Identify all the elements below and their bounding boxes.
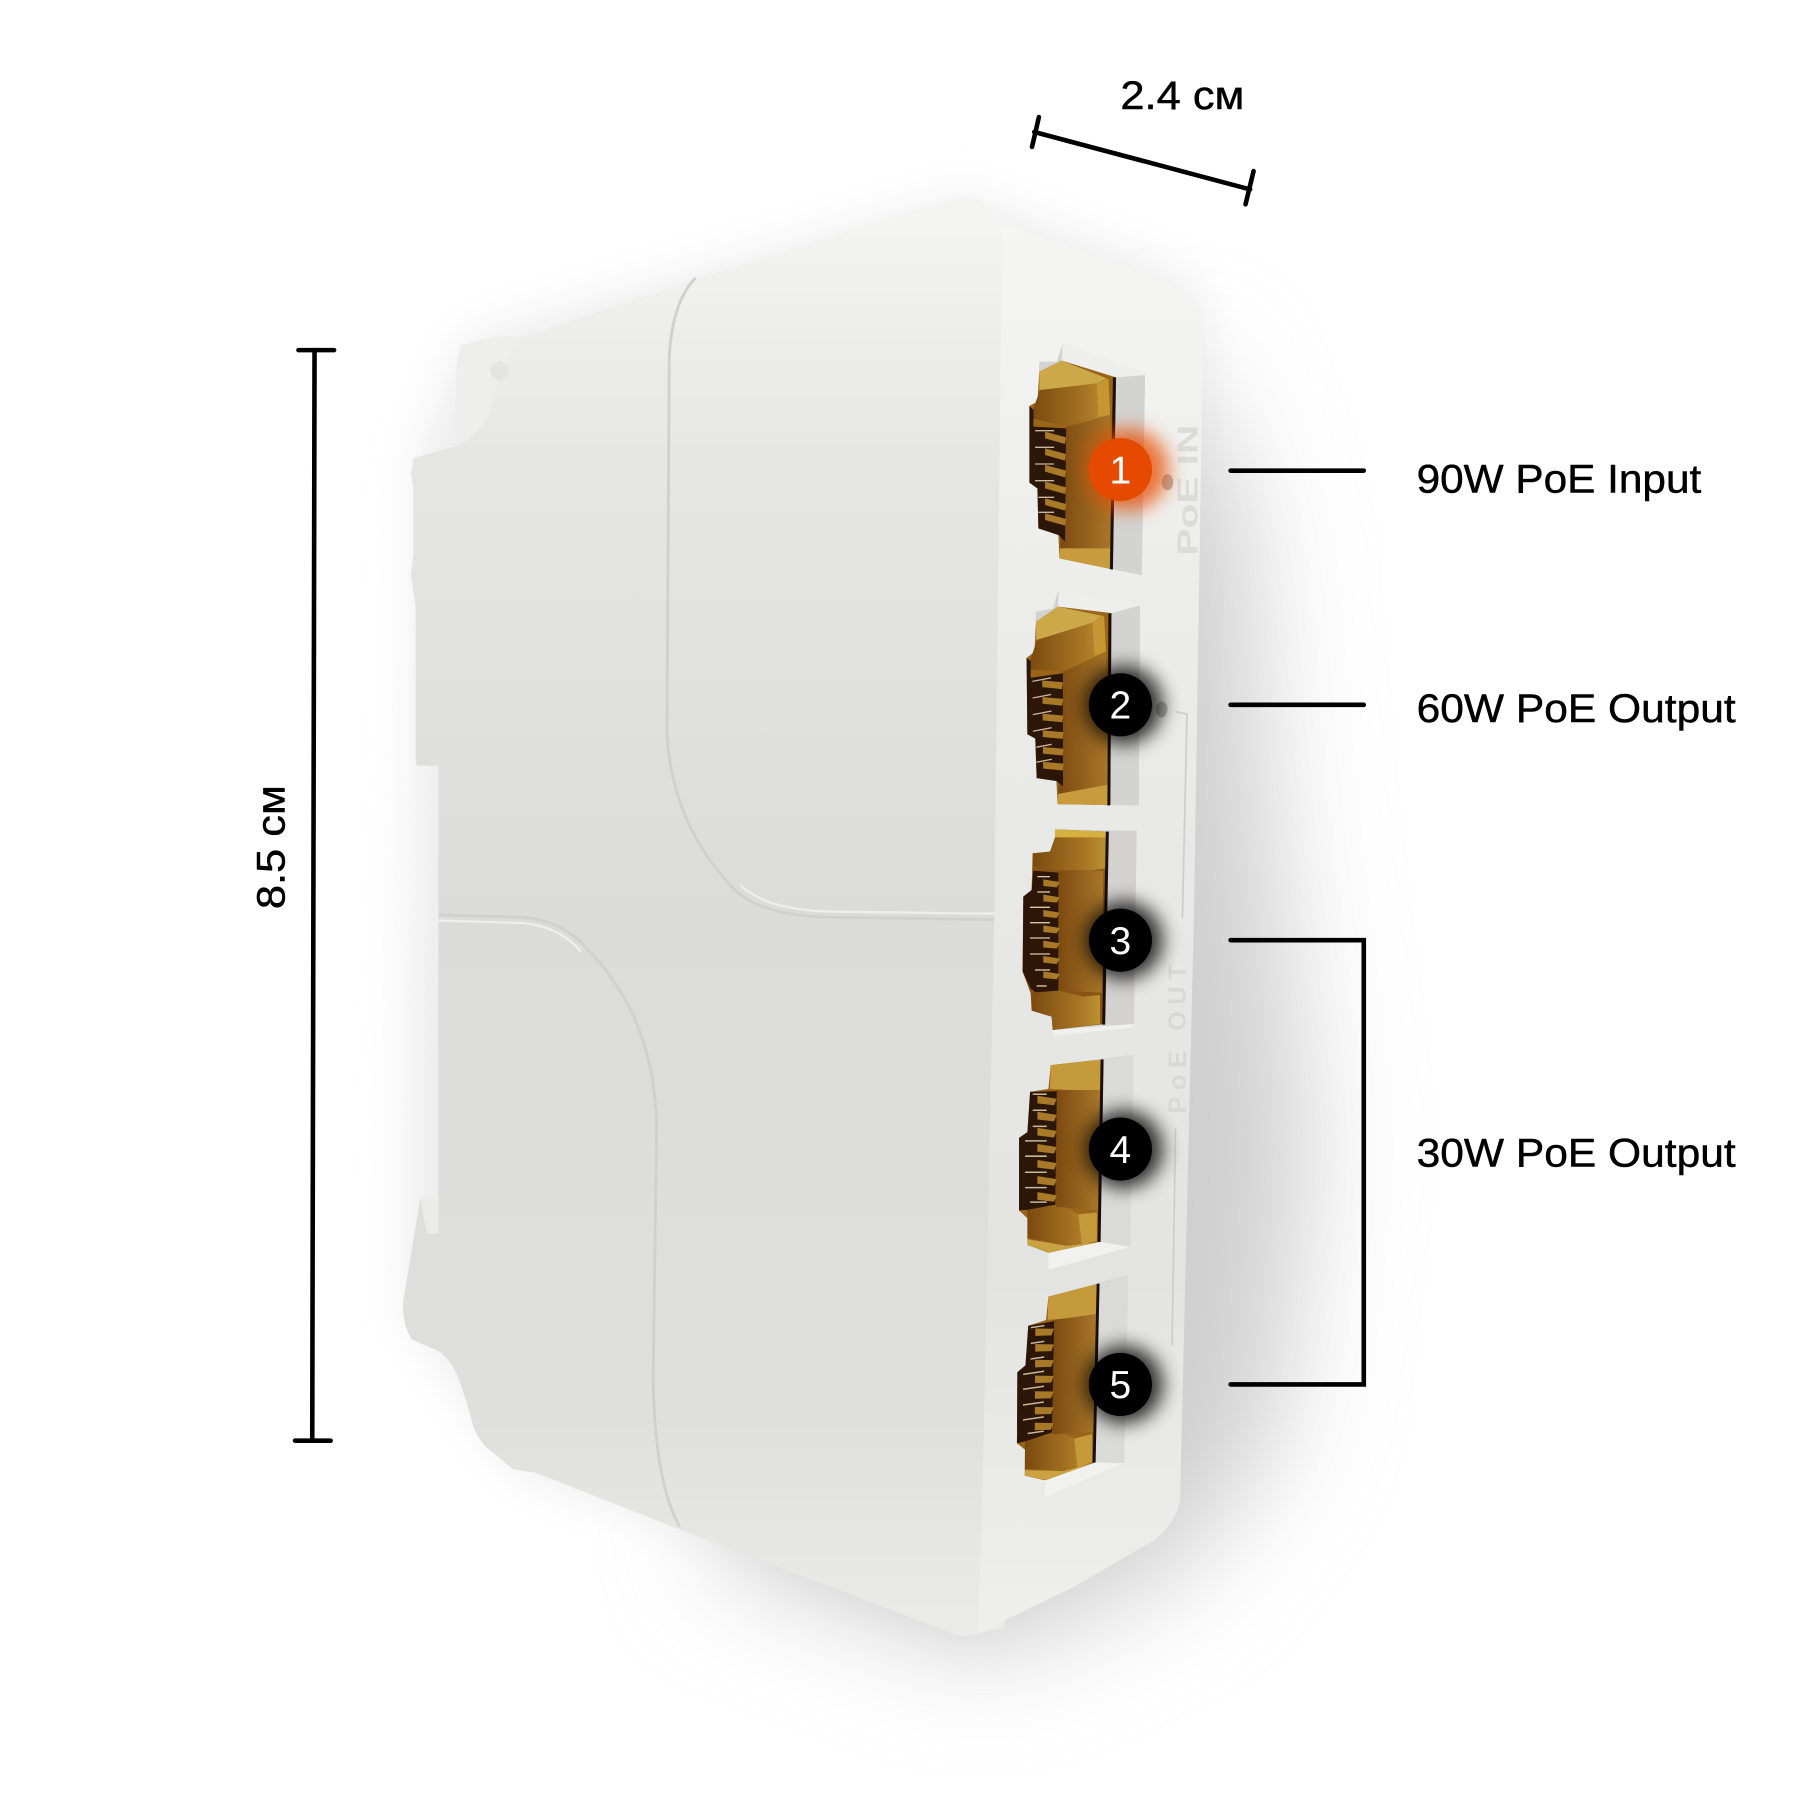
height dimension <box>295 350 334 1441</box>
width label: 2.4 см <box>1120 73 1244 118</box>
mounting clip, top <box>455 336 521 447</box>
callout 5: 5 <box>1110 1364 1131 1407</box>
embossed label: PoE IN: PoE IN <box>1172 425 1204 556</box>
callout 2 <box>1085 666 1163 744</box>
callout 4 <box>1085 1110 1163 1188</box>
label: 30W PoE Output: 30W PoE Output <box>1417 1130 1736 1175</box>
leader line port 1 <box>1231 469 1364 473</box>
port 4 <box>1019 1055 1133 1270</box>
indicator LED port 1 <box>1162 474 1173 490</box>
port 3 <box>1023 829 1137 1036</box>
port 5 <box>1017 1275 1128 1501</box>
callout 4: 4 <box>1110 1129 1131 1172</box>
label: 60W PoE Output: 60W PoE Output <box>1417 686 1736 731</box>
callout 3: 3 <box>1110 920 1131 963</box>
port 2 <box>1026 574 1142 826</box>
height label: 8.5 см <box>249 785 294 909</box>
seam highlight <box>439 885 994 952</box>
device front face <box>978 224 1203 1634</box>
mounting clip, bottom <box>420 1196 439 1234</box>
callout 2: 2 <box>1110 685 1131 728</box>
device silhouette: side panel <box>403 195 1004 1636</box>
width dimension <box>1032 117 1254 204</box>
lower seam <box>439 915 680 1527</box>
device body <box>403 195 1204 1636</box>
callout 1: 1 <box>1110 449 1131 492</box>
port 1 <box>1029 343 1145 575</box>
embossed label: PoE OUT: PoE OUT <box>1164 964 1192 1114</box>
callout 1 <box>1086 428 1169 511</box>
callout 5 <box>1085 1345 1163 1423</box>
bracket ports 3 to 5 <box>1231 940 1364 1384</box>
leader line port 2 <box>1231 703 1364 707</box>
lower ports <box>1017 1055 1133 1501</box>
label: 90W PoE Input: 90W PoE Input <box>1417 456 1701 501</box>
embossed bracket <box>1172 712 1187 1345</box>
drop shadow behind device <box>408 197 1309 1655</box>
indicator LED port 2 <box>1156 701 1167 717</box>
ports <box>1026 343 1145 826</box>
upper seam <box>667 278 994 920</box>
callout 3 <box>1085 901 1163 979</box>
